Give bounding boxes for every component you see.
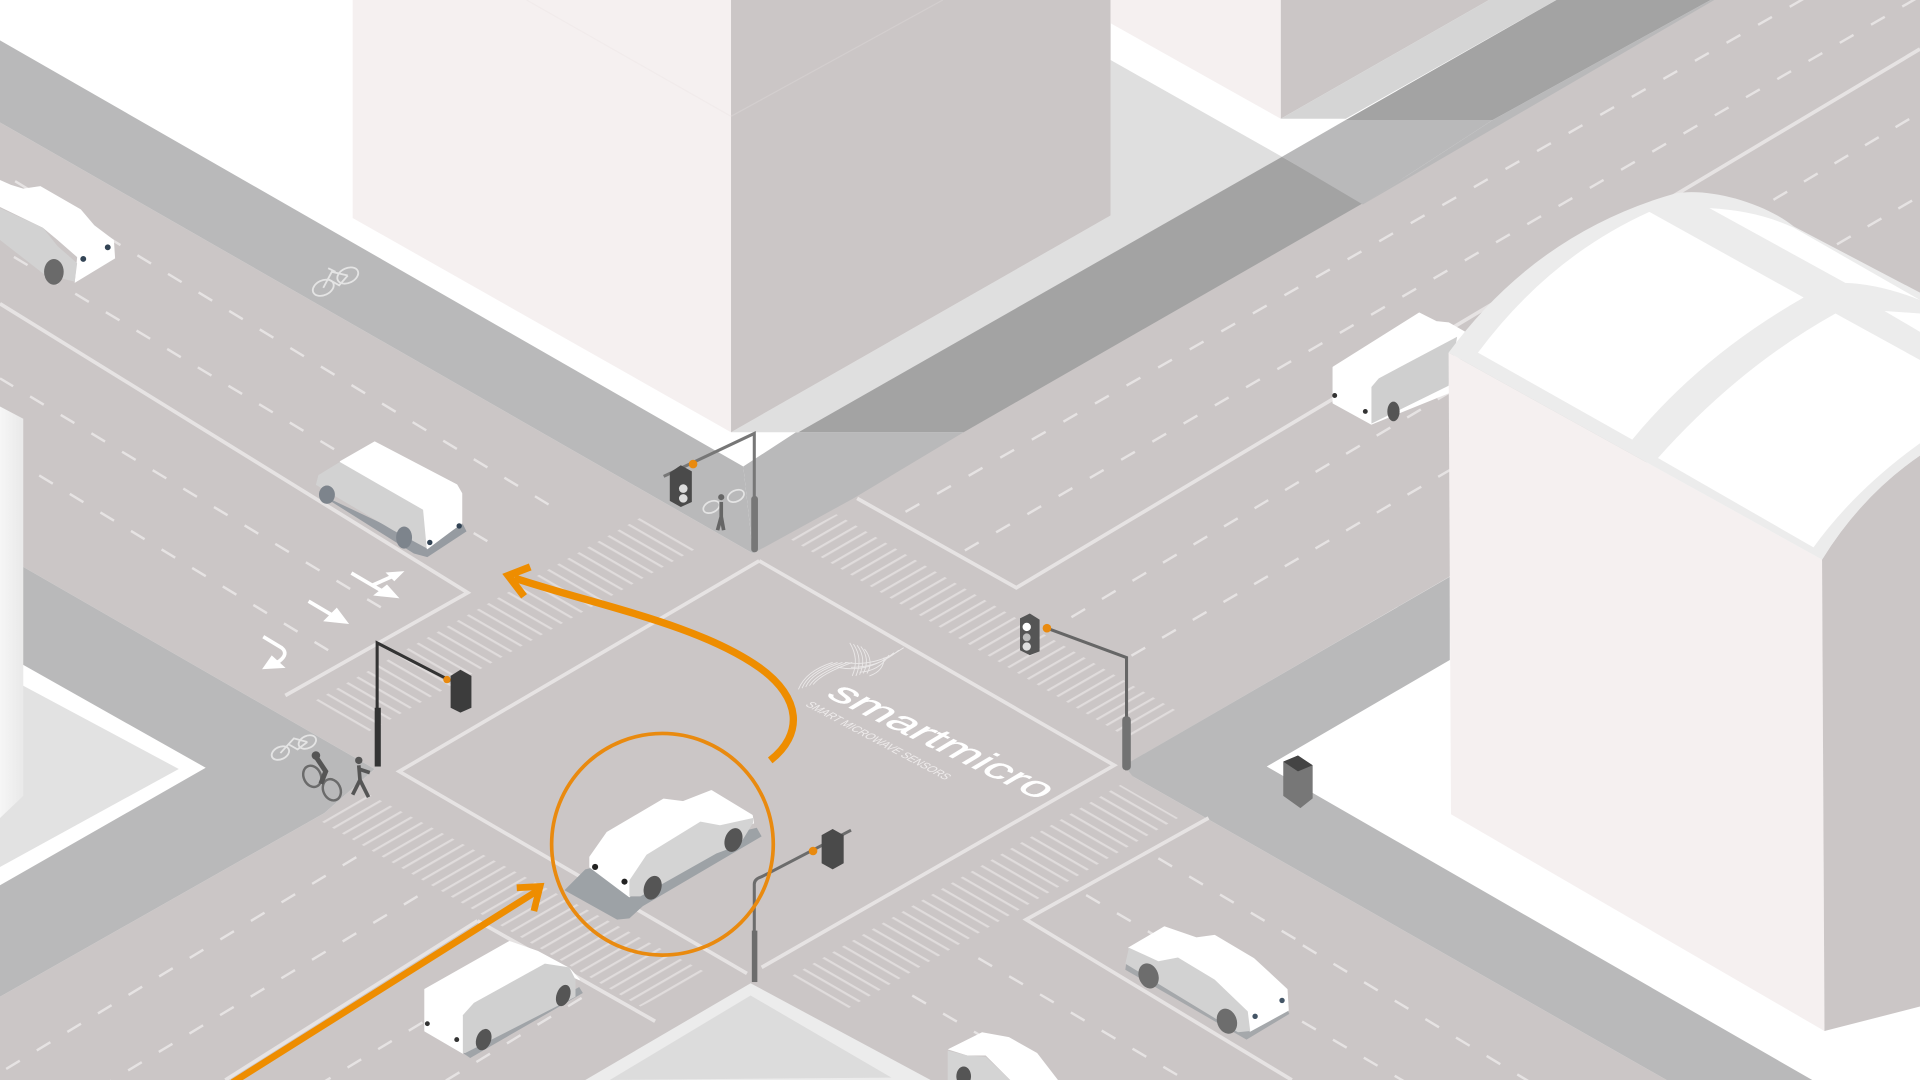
crosswalk: east — [790, 785, 1178, 1010]
lane markings: north-west arm — [0, 172, 549, 696]
van: north-west — [316, 442, 467, 557]
arrow: approach path — [233, 887, 540, 1080]
detection circle — [552, 733, 773, 955]
van: north-east — [1332, 313, 1466, 424]
building: arched roof hall — [1449, 192, 1920, 1031]
arrow: u-turn — [263, 637, 285, 669]
sidewalk: south-east — [1124, 577, 1812, 1080]
icon: bicycle marking north-west — [310, 264, 361, 299]
block: south corner plaza — [585, 983, 931, 1080]
road arrows — [263, 572, 403, 669]
intersection outline — [399, 561, 1114, 973]
logo: wordmark: smartmicro — [817, 677, 1069, 805]
logo: tagline: SMART MICROWAVE SENSORS — [802, 701, 954, 782]
icon: bicycle marking south-west — [269, 733, 318, 762]
lane markings: south-east arm — [912, 818, 1531, 1080]
ground shadows north-east — [731, 0, 1714, 432]
car: top-left — [0, 180, 115, 285]
icon: bicycle marking north — [701, 487, 746, 516]
lane markings: north-east arm — [857, 0, 1920, 656]
arrow: straight and turn — [351, 572, 403, 598]
logo: smartmicro road marking — [798, 643, 1069, 805]
building: centre block — [353, 0, 1111, 432]
van: south-west — [425, 942, 583, 1058]
logo: wave mark — [798, 643, 904, 689]
traffic light: north — [664, 433, 758, 552]
traffic light: west — [375, 643, 471, 767]
cyclist — [300, 751, 344, 803]
block: west plaza — [0, 662, 179, 867]
crosswalk: west — [316, 514, 700, 732]
sidewalk: south-west — [0, 553, 375, 997]
lane markings: south-west arm — [0, 857, 655, 1080]
car: circled ego vehicle — [564, 791, 762, 920]
pedestrian: south-west — [353, 757, 370, 797]
traffic light: south — [752, 829, 851, 982]
control box — [1283, 756, 1313, 808]
arrow: straight — [309, 601, 348, 623]
sidewalk: north-east — [743, 432, 964, 553]
block: west building edge — [0, 407, 23, 818]
car: bottom — [948, 1032, 1058, 1080]
car: south-east — [1125, 927, 1289, 1040]
sidewalk: north-west — [0, 40, 753, 553]
building: far block — [1111, 0, 1556, 119]
crosswalk: north — [790, 514, 1176, 741]
pedestrian: north — [718, 494, 724, 530]
crosswalk: south — [320, 793, 708, 1007]
arrow: turning path — [508, 567, 793, 760]
traffic light: east — [1020, 613, 1131, 770]
